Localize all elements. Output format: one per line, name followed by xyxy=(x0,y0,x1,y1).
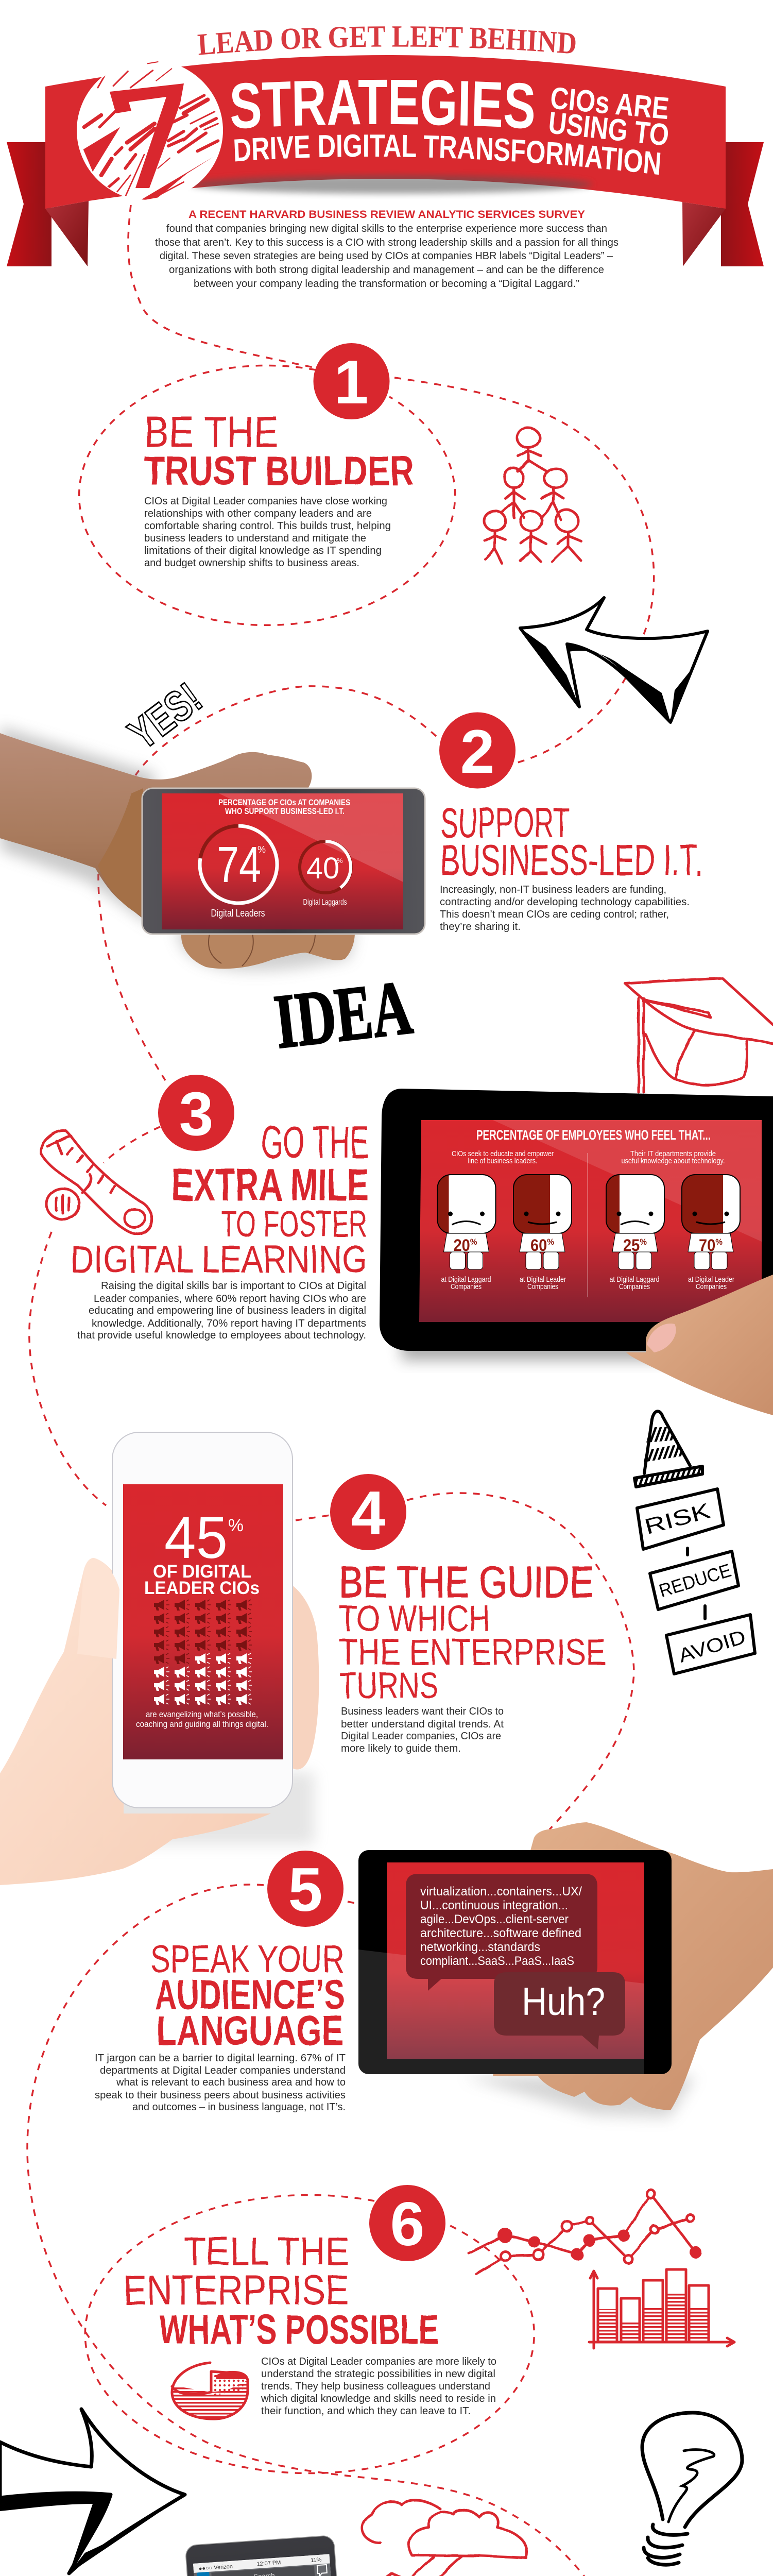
heading: be the guide: TO WHICH xyxy=(339,1599,490,1639)
arrow: big black left arrow xyxy=(520,598,708,722)
body text 1: comfortable sharing control. This builds trust, helping xyxy=(144,520,391,532)
hand holding tablet from right xyxy=(463,1822,773,2117)
character: 60 percent: % xyxy=(547,1237,554,1247)
tablet body xyxy=(380,1089,773,1351)
phone screen: coaching and guiding all things digital. xyxy=(136,1719,268,1729)
speech bubble: jargon: compliant...SaaS...PaaS...IaaS xyxy=(420,1954,574,1968)
heading: support business-led IT xyxy=(440,800,702,885)
number 6 badge: 6 xyxy=(390,2190,424,2259)
body text 1 xyxy=(144,496,391,569)
speech bubble: jargon xyxy=(406,1874,597,1991)
number 3 badge: 3 xyxy=(179,1079,213,1148)
connector stub xyxy=(348,1902,355,1903)
connector ring: strategy 6 xyxy=(85,2195,534,2473)
character: 70 percent: % xyxy=(715,1237,723,1247)
body text 3: Leader companies, where 60% report having CIOs who are xyxy=(94,1293,366,1304)
tablet screen xyxy=(358,1862,644,2074)
number 1 badge: 1 xyxy=(334,348,368,417)
body text 5: departments at Digital Leader companies understand xyxy=(100,2065,346,2076)
body text 4: Digital Leader companies, CIOs are xyxy=(341,1731,501,1742)
number 5 badge: 5 xyxy=(288,1855,322,1924)
body text 1: and budget ownership shifts to business areas. xyxy=(144,557,359,569)
phone screen: % xyxy=(228,1516,244,1535)
strategies word: STRATEGIES xyxy=(231,79,534,129)
connector path: phone to step 4 xyxy=(296,1515,330,1520)
heading: be the guide: BE THE GUIDE xyxy=(339,1558,594,1607)
number 1 badge xyxy=(313,343,389,419)
sign: avoid: AVOID xyxy=(676,1626,748,1667)
big scribbled seven xyxy=(77,60,223,201)
word: idea: IDEA xyxy=(270,964,416,1065)
palm shading xyxy=(98,788,143,917)
strategy 2 xyxy=(0,712,702,971)
chart title: PERCENTAGE OF CIOs AT COMPANIES xyxy=(218,798,350,807)
heading: speak your audience's language: SPEAK YOUR xyxy=(150,1937,344,1980)
right question: Their IT departments provide xyxy=(630,1149,716,1158)
tablet gloss xyxy=(358,1950,644,2074)
body text 6: CIOs at Digital Leader companies are more likely to xyxy=(261,2356,496,2367)
speech bubble: huh: Huh? xyxy=(522,1980,605,2024)
number 4 badge: 4 xyxy=(351,1479,386,1548)
heading: go the extra mile: GO THE xyxy=(261,1116,369,1167)
speech bubble: huh xyxy=(494,1972,625,2049)
right ribbon fold xyxy=(682,202,726,266)
right question xyxy=(621,1149,725,1165)
left question xyxy=(452,1149,554,1165)
connector path: step 4 to tablet xyxy=(407,1493,634,1829)
strategy 4 xyxy=(0,1411,755,1885)
character: 70 percent xyxy=(682,1175,740,1269)
character: 70 percent: 70 xyxy=(699,1236,717,1255)
speech bubble: jargon: virtualization...containers...UX/ xyxy=(420,1885,582,1899)
connector ring: strategy 1 xyxy=(79,365,455,625)
strategy 7 xyxy=(51,2535,655,2576)
intro paragraph: found that companies bringing new digital skills to the enterprise experience more success than xyxy=(166,223,607,234)
body text 6: their function, and which they can leave to IT. xyxy=(261,2405,471,2417)
character captions: at Digital Leader xyxy=(688,1275,734,1284)
heading: be the trust builder xyxy=(144,408,414,494)
body text 3: knowledge. Additionally, 70% report having IT departments xyxy=(92,1318,366,1329)
heading: speak your audience's language: LANGUAGE xyxy=(157,2008,343,2054)
speech bubble: jargon: networking...standards xyxy=(420,1940,540,1954)
icon: diploma scroll xyxy=(41,1130,152,1234)
tablet body xyxy=(358,1850,672,2074)
header banner xyxy=(7,26,764,266)
donut: digital laggards 40 percent: Digital Laggards xyxy=(303,898,347,907)
character captions: at Digital Laggard xyxy=(441,1275,491,1284)
heading: tell the enterprise what's possible xyxy=(123,2229,439,2353)
connector: risk to reduce xyxy=(686,1548,689,1555)
sign: risk: RISK xyxy=(642,1498,713,1539)
smartphone xyxy=(185,2535,353,2576)
sign: risk xyxy=(637,1489,724,1549)
donut: digital laggards 40 percent: 40 xyxy=(306,852,339,885)
heading: be the trust builder: BE THE xyxy=(144,408,279,457)
linkedin feed screen xyxy=(193,2554,346,2576)
body text 1: business leaders to understand and mitigate the xyxy=(144,533,366,544)
strategies word xyxy=(231,79,534,129)
body text 6 xyxy=(261,2356,496,2417)
heading: go the extra mile: DIGITAL LEARNING xyxy=(71,1238,367,1281)
connector: reduce to avoid xyxy=(703,1606,707,1619)
intro paragraph: organizations with both strong digital leadership and management – and can be the difference xyxy=(169,264,604,276)
heading: tell the enterprise what's possible: WHAT’S POSSIBLE xyxy=(159,2307,439,2353)
phone frame xyxy=(142,788,425,934)
arm and palm xyxy=(0,733,312,927)
stat: 45 percent: 45 xyxy=(164,1505,228,1571)
intro text block xyxy=(155,209,619,290)
heading: tell the enterprise what's possible: ENTERPRISE xyxy=(123,2267,349,2314)
body text 4 xyxy=(341,1706,504,1754)
connector path: phone to step 3 xyxy=(98,874,165,1080)
connector path: step 3 to diploma xyxy=(104,1127,160,1163)
strategy 1 xyxy=(144,343,581,569)
megaphone pictogram grid xyxy=(154,1600,252,1705)
icon: hierarchy of stick people xyxy=(484,428,581,564)
character: 25 percent: % xyxy=(640,1237,647,1247)
body text 2: This doesn’t mean CIOs are ceding control; rather, xyxy=(440,909,669,920)
strategy 5 xyxy=(95,1822,773,2117)
tablet screen xyxy=(419,1120,762,1322)
phone screen: LEADER CIOs xyxy=(144,1578,260,1598)
heading: go the extra mile xyxy=(71,1116,369,1281)
hand holding phone xyxy=(0,726,355,971)
body text 5: and outcomes – in business language, not IT’s. xyxy=(132,2102,346,2113)
donut: digital leaders 74 percent: 74 xyxy=(217,836,261,893)
stat label: OF DIGITAL xyxy=(153,1562,251,1582)
arrow: big black right arrow xyxy=(0,2409,185,2573)
heading: go the extra mile: TO FOSTER xyxy=(221,1204,367,1245)
body text 3: Raising the digital skills bar is important to CIOs at Digital xyxy=(101,1280,366,1292)
connector path: intro to step 1 xyxy=(128,205,316,368)
sign: reduce: REDUCE xyxy=(657,1560,733,1601)
icon: light bulb xyxy=(642,2413,742,2565)
phone screen: WHO SUPPORT BUSINESS-LED I.T. xyxy=(225,806,345,816)
donut: digital leaders 74 percent xyxy=(200,826,277,919)
body text 5 xyxy=(95,2053,346,2113)
body text 2: Increasingly, non-IT business leaders are funding, xyxy=(440,884,666,895)
donut: digital leaders 74 percent: % xyxy=(257,844,266,855)
body text 2 xyxy=(440,884,690,933)
character captions: Companies xyxy=(451,1282,482,1291)
sign: reduce xyxy=(650,1551,738,1609)
using to: USING TO xyxy=(547,105,671,152)
intro paragraph: those that aren’t. Key to this success is a CIO with strong leadership skills and a passion for all things xyxy=(155,237,619,248)
connector path: step 1 to step 2 xyxy=(394,378,654,762)
intro paragraph xyxy=(155,223,619,290)
icon: sketched pie chart xyxy=(172,2363,248,2419)
character: 20 percent: 20 xyxy=(453,1236,472,1255)
phone screen xyxy=(123,1484,283,1759)
heading: be the guide xyxy=(339,1558,606,1706)
character: 20 percent: % xyxy=(470,1237,477,1247)
body text 2: they’re sharing it. xyxy=(440,921,521,933)
donut: digital leaders 74 percent: Digital Leaders xyxy=(211,908,265,919)
character: 25 percent xyxy=(606,1175,664,1269)
body text 5: IT jargon can be a barrier to digital learning. 67% of IT xyxy=(95,2053,346,2064)
linkedin feed screen: 11% xyxy=(311,2557,322,2564)
tablet shadow xyxy=(402,1334,773,1360)
heading: be the guide: TURNS xyxy=(339,1666,439,1706)
character captions: at Digital Laggard xyxy=(610,1275,659,1284)
stat caption: are evangelizing what’s possible, xyxy=(146,1709,258,1719)
number 3 badge xyxy=(158,1075,234,1151)
body text 5: speak to their business peers about business activities xyxy=(95,2090,346,2101)
character: 60 percent xyxy=(513,1175,572,1269)
hand holding phone: palm xyxy=(0,1558,319,1885)
speech bubble: jargon: architecture...software defined xyxy=(420,1926,581,1940)
body text 6: trends. They help business colleagues understand xyxy=(261,2381,490,2392)
connector path: step 2 to phone xyxy=(135,686,436,775)
strategy 6 xyxy=(123,2185,734,2419)
heading: tell the enterprise what's possible: TELL THE xyxy=(184,2229,349,2274)
body text 4: better understand digital trends. At xyxy=(341,1719,504,1730)
body text 3 xyxy=(77,1280,366,1341)
intro heading: A RECENT HARVARD BUSINESS REVIEW ANALYTIC SERVICES SURVEY xyxy=(188,209,585,221)
intro paragraph: digital. These seven strategies are being used by CIOs at companies HBR labels “Digital Leaders” – xyxy=(160,250,613,262)
CIOs are: CIOs ARE xyxy=(549,80,671,126)
main red band xyxy=(45,55,726,209)
drive digital transformation: DRIVE DIGITAL TRANSFORMATION xyxy=(234,134,660,175)
body text 1: relationships with other company leaders and are xyxy=(144,508,372,519)
donut: digital laggards 40 percent: % xyxy=(337,857,343,865)
arm shadow xyxy=(0,726,154,927)
body text 1: CIOs at Digital Leader companies have close working xyxy=(144,496,387,507)
character captions: Companies xyxy=(527,1282,558,1291)
character: 20 percent xyxy=(438,1175,495,1269)
speech bubble: jargon: UI...continuous integration... xyxy=(420,1899,568,1912)
number 2 badge xyxy=(439,712,516,788)
left question: CIOs seek to educate and empower xyxy=(452,1149,554,1158)
character captions xyxy=(441,1275,734,1291)
left ribbon fold xyxy=(45,201,89,266)
kicker: lead or get left behind: LEAD OR GET LEFT BEHIND xyxy=(197,26,576,55)
heading: support business-led IT: SUPPORT xyxy=(440,800,570,846)
kicker: lead or get left behind xyxy=(197,26,576,55)
right question: useful knowledge about technology. xyxy=(621,1157,725,1165)
number 6 badge xyxy=(369,2185,445,2261)
body text 6: understand the strategic possibilities in new digital xyxy=(261,2368,495,2380)
icon: traffic cone xyxy=(634,1411,702,1487)
speech bubble: jargon: agile...DevOps...client-server xyxy=(420,1912,569,1926)
thumb over phone edge xyxy=(77,1558,119,1659)
linkedin feed screen: 12:07 PM xyxy=(256,2560,281,2567)
fingers xyxy=(181,933,355,969)
icon: clouds with lightning arrow xyxy=(356,2500,527,2576)
phone body xyxy=(112,1432,293,1808)
phone frame xyxy=(185,2535,353,2576)
right ribbon tail xyxy=(721,142,764,266)
body text 3: that provide useful knowledge to employees about technology. xyxy=(77,1330,366,1341)
character captions: Companies xyxy=(696,1282,727,1291)
body text 6: which digital knowledge and skills need to reside in xyxy=(261,2393,496,2404)
body text 1: limitations of their digital knowledge as IT spending xyxy=(144,545,382,556)
character: 25 percent: 25 xyxy=(623,1236,642,1255)
heading: speak your audience's language: AUDIENCE’S xyxy=(154,1972,345,2018)
number 4 badge xyxy=(330,1474,406,1550)
character: 60 percent: 60 xyxy=(530,1236,549,1255)
character captions: at Digital Leader xyxy=(520,1275,566,1284)
left ribbon tail xyxy=(7,142,51,266)
donut: digital laggards 40 percent xyxy=(300,841,351,907)
strategy 3 xyxy=(0,1075,773,2576)
linkedin feed screen: ●●○○ Verizon xyxy=(198,2564,233,2572)
body text 4: more likely to guide them. xyxy=(341,1743,461,1754)
word: yes: YES! xyxy=(119,673,211,758)
number 5 badge xyxy=(267,1851,343,1927)
heading: speak your audience's language xyxy=(150,1937,345,2054)
number 2 badge: 2 xyxy=(460,717,494,786)
icon: graduation cap xyxy=(625,978,773,1092)
connector path: diploma to phone 4 xyxy=(29,1232,106,1505)
sign: avoid xyxy=(666,1615,755,1674)
phone screen xyxy=(162,793,403,929)
icon: sketched bar chart xyxy=(589,2269,734,2348)
connector path: step 5 to step 7 xyxy=(27,1885,606,2576)
band shadow xyxy=(191,175,592,194)
finger shadow xyxy=(175,927,355,971)
body text 5: what is relevant to each business area and how to xyxy=(116,2077,346,2088)
heading: be the trust builder: TRUST BUILDER xyxy=(144,448,414,494)
left question: line of business leaders. xyxy=(468,1157,538,1165)
character captions: Companies xyxy=(619,1282,650,1291)
heading: go the extra mile: EXTRA MILE xyxy=(171,1159,369,1210)
column divider xyxy=(587,1153,588,1297)
body text 3: educating and empowering line of business leaders in digital xyxy=(89,1305,366,1316)
body text 4: Business leaders want their CIOs to xyxy=(341,1706,504,1717)
hand holding tablet xyxy=(626,1275,773,1415)
heading: be the guide: THE ENTERPRISE xyxy=(339,1632,606,1673)
icon: sketched line chart xyxy=(469,2190,700,2274)
body text 2: contracting and/or developing technology capabilities. xyxy=(440,896,690,908)
intro paragraph: between your company leading the transformation or becoming a “Digital Laggard.” xyxy=(194,278,579,290)
